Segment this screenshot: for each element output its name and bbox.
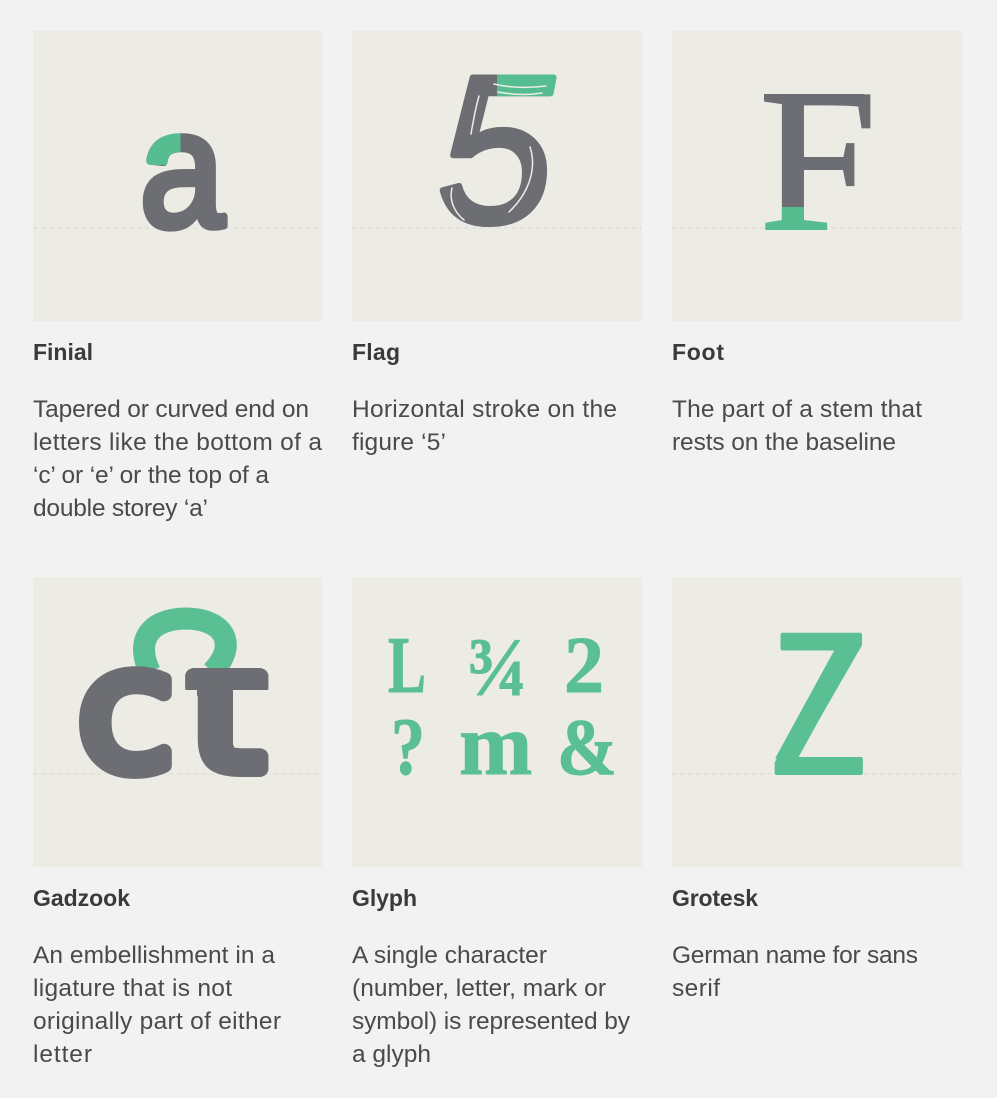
text: Foot description: rests on the baseline (672, 429, 896, 456)
text: Foot description (672, 396, 922, 456)
text: Flag description: figure ‘5’ (352, 429, 446, 456)
text: Gadzook description (33, 942, 281, 1068)
panel: Glyph (352, 577, 642, 867)
text: Glyph description: (number, letter, mark or (352, 975, 606, 1002)
heading: Gadzook: Gadzook (33, 885, 130, 911)
panel: Gadzook (33, 577, 322, 867)
specimen: ct ligature with green gadzook: t (189, 612, 264, 810)
specimen: letter a with green finial: a (140, 77, 224, 261)
specimen: six green glyphs: 2 (564, 622, 604, 710)
text: Glyph description: a glyph (352, 1041, 431, 1068)
heading: Glyph: Glyph (352, 885, 417, 911)
text: Finial description: ‘c’ or ‘e’ or the top of a (33, 462, 269, 489)
heading: Grotesk: Grotesk (672, 885, 758, 911)
specimen: ct ligature with green gadzook (79, 608, 268, 779)
specimen: six green glyphs (388, 621, 617, 794)
text: Gadzook description: An embellishment in a (33, 942, 275, 969)
specimen: figure 5 with green flag: 5 (438, 32, 554, 267)
text: Grotesk description (672, 942, 918, 1002)
specimen: letter F with green foot: F (759, 48, 877, 274)
heading: Finial: Finial (33, 339, 93, 365)
text: Finial description: Tapered or curved end on (33, 396, 309, 423)
specimen: letter a with green finial (142, 133, 228, 232)
text: Glyph description: A single character (352, 942, 547, 969)
heading: Foot: Foot (672, 339, 724, 365)
specimen: letter a with green finial: a (140, 77, 224, 261)
specimen: six green glyphs: L (388, 622, 426, 710)
text: Gadzook description: letter (33, 1041, 92, 1068)
specimen: six green glyphs: & (557, 704, 617, 792)
specimen: letter F with green foot (764, 94, 870, 230)
specimen: ct ligature with green gadzook: c (77, 612, 175, 810)
text: Glyph description (352, 942, 631, 1068)
heading: Flag: Flag (352, 339, 400, 365)
text: Grotesk description: serif (672, 975, 720, 1002)
text: Gadzook description: ligature that is not (33, 975, 232, 1002)
specimen: six green glyphs: m (459, 697, 532, 794)
text: Finial description: double storey ‘a’ (33, 495, 208, 522)
text: Finial description: letters like the bottom of a (33, 429, 322, 456)
specimen: figure 5 with green flag: 5 (438, 32, 554, 267)
specimen: six green glyphs: ? (391, 701, 425, 792)
panel: Grotesk (672, 554, 962, 867)
panel: Foot (672, 31, 962, 321)
text: Foot description: The part of a stem that (672, 396, 922, 423)
text: Flag description: Horizontal stroke on the (352, 396, 617, 423)
text: Grotesk description: German name for sans (672, 942, 918, 969)
text: Flag description (352, 396, 617, 456)
text: Gadzook description: originally part of either (33, 1008, 281, 1035)
panel: Finial (33, 31, 322, 321)
specimen: six green glyphs: ¾ (467, 621, 527, 714)
specimen: letter Z: Z (768, 554, 870, 828)
text: Finial description (33, 396, 322, 522)
panel: Flag (352, 31, 642, 321)
specimen: letter F with green foot: F (759, 48, 877, 274)
text: Glyph description: symbol) is represented by (352, 1008, 631, 1035)
specimen: figure 5 with green flag (440, 74, 556, 227)
